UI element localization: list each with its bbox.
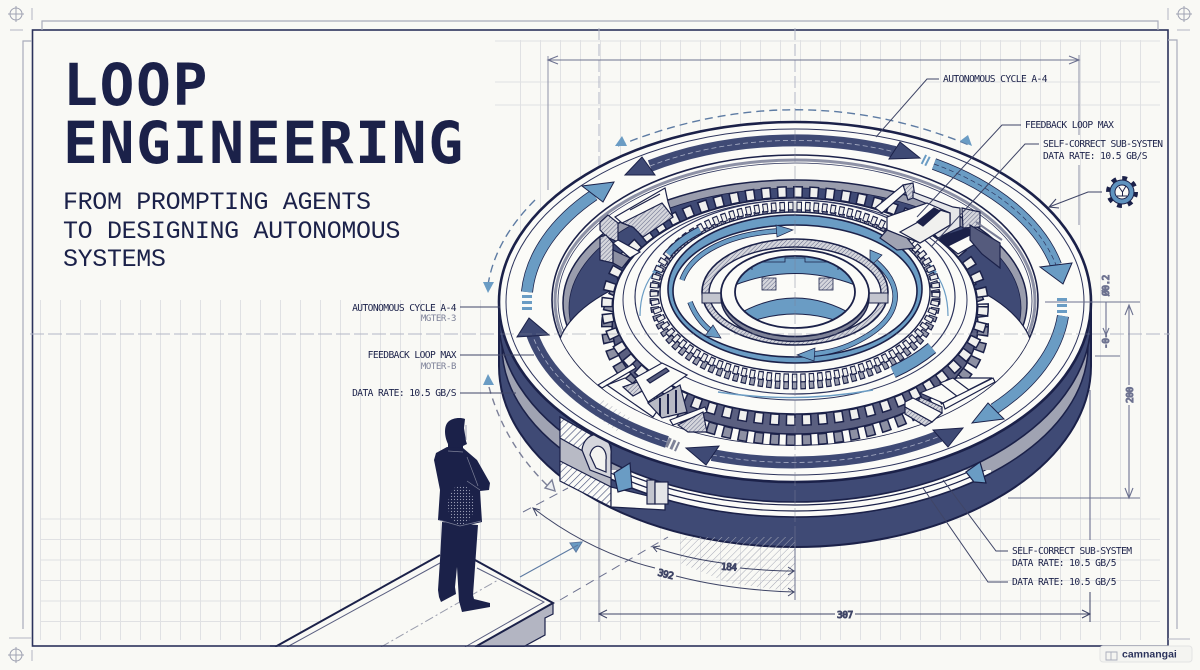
right side dimensions: -0- (1101, 333, 1112, 349)
arrow: blue right (923, 159, 1072, 284)
hatched bearing ring and spokes (702, 239, 888, 345)
lower housing (498, 310, 1092, 548)
suit seams (439, 425, 481, 526)
wedge dimensions 184 and 392: 392 (656, 568, 674, 582)
callouts left: MOTER-B (421, 362, 456, 372)
small gear (654, 206, 936, 385)
subtitle: FROM PROMPTING AGENTS (63, 188, 371, 217)
flow arrows on outer track (517, 140, 1072, 465)
callouts left: FEEDBACK LOOP MAX (368, 350, 457, 361)
watermark chip: camnangai (1122, 648, 1177, 660)
legs (438, 522, 490, 612)
callouts left: MGTER-3 (421, 314, 456, 324)
loop machine (498, 120, 1092, 548)
block: top right (875, 183, 1002, 268)
subtitle: SYSTEMS (63, 245, 166, 274)
figure: engineer looking at loop (434, 418, 490, 612)
section cut (560, 417, 986, 510)
callouts bottom right: DATA RATE: 10.5 GB/5 (1012, 577, 1116, 588)
arrow: dark bottom (686, 428, 963, 465)
callouts top right: AUTONOMOUS CYCLE A-4 (943, 74, 1048, 85)
right side dimensions: 200 (1125, 387, 1136, 403)
gear icon (1108, 178, 1136, 206)
faint centre lines over machine (500, 130, 1090, 600)
callouts top right: FEEDBACK LOOP MAX (1025, 120, 1114, 131)
blue direction arrow (520, 542, 582, 577)
bottom width dimension: 307 (837, 610, 853, 621)
block: top left (600, 188, 673, 268)
block: bottom left (598, 363, 707, 432)
head (445, 418, 467, 450)
right side dimensions (1008, 275, 1140, 540)
top surface outer ring (499, 122, 1091, 482)
arrow: blue left (527, 182, 614, 311)
arrow: blue lower right (972, 298, 1063, 423)
callouts bottom right (923, 480, 1132, 588)
callouts top right: DATA RATE: 10.5 GB/S (1043, 151, 1148, 162)
wedge dimensions 184 and 392: 184 (721, 562, 738, 574)
callouts top right: SELF-CORRECT SUB-SYSTEN (1043, 139, 1163, 150)
callouts bottom right: SELF-CORRECT SUB-SYSTEM (1012, 546, 1132, 557)
platform (270, 555, 560, 650)
block: bottom right (905, 378, 995, 426)
central hub (721, 250, 869, 342)
torso (434, 447, 490, 527)
gear leader arrow (1049, 192, 1102, 208)
title (63, 51, 465, 177)
recess (557, 180, 1033, 457)
callouts top right (876, 74, 1163, 247)
title: ENGINEERING (63, 109, 465, 177)
wedge dimensions 184 and 392 (523, 488, 795, 600)
back pattern (448, 485, 474, 525)
arrow: dark top (625, 140, 920, 175)
callouts left: AUTONOMOUS CYCLE A-4 (352, 303, 457, 314)
arrow: dark left (517, 318, 678, 447)
top width dimension (548, 56, 1079, 64)
subtitle: TO DESIGNING AUTONOMOUS (63, 217, 400, 246)
callouts bottom right: DATA RATE: 10.5 GB/5 (1012, 558, 1116, 569)
callouts left: DATA RATE: 10.5 GB/S (352, 388, 457, 399)
big gear (607, 192, 983, 440)
blue ring with inner flow arrows (668, 215, 922, 363)
right side dimensions: Ø0.2 (1101, 275, 1112, 296)
subtitle (63, 188, 400, 274)
watermark chip (1100, 646, 1192, 662)
mechanical blocks (598, 183, 1002, 432)
dashed rotation arcs (483, 110, 972, 491)
title: LOOP (63, 51, 209, 119)
callouts left (352, 303, 534, 399)
bottom width dimension (599, 592, 1090, 622)
